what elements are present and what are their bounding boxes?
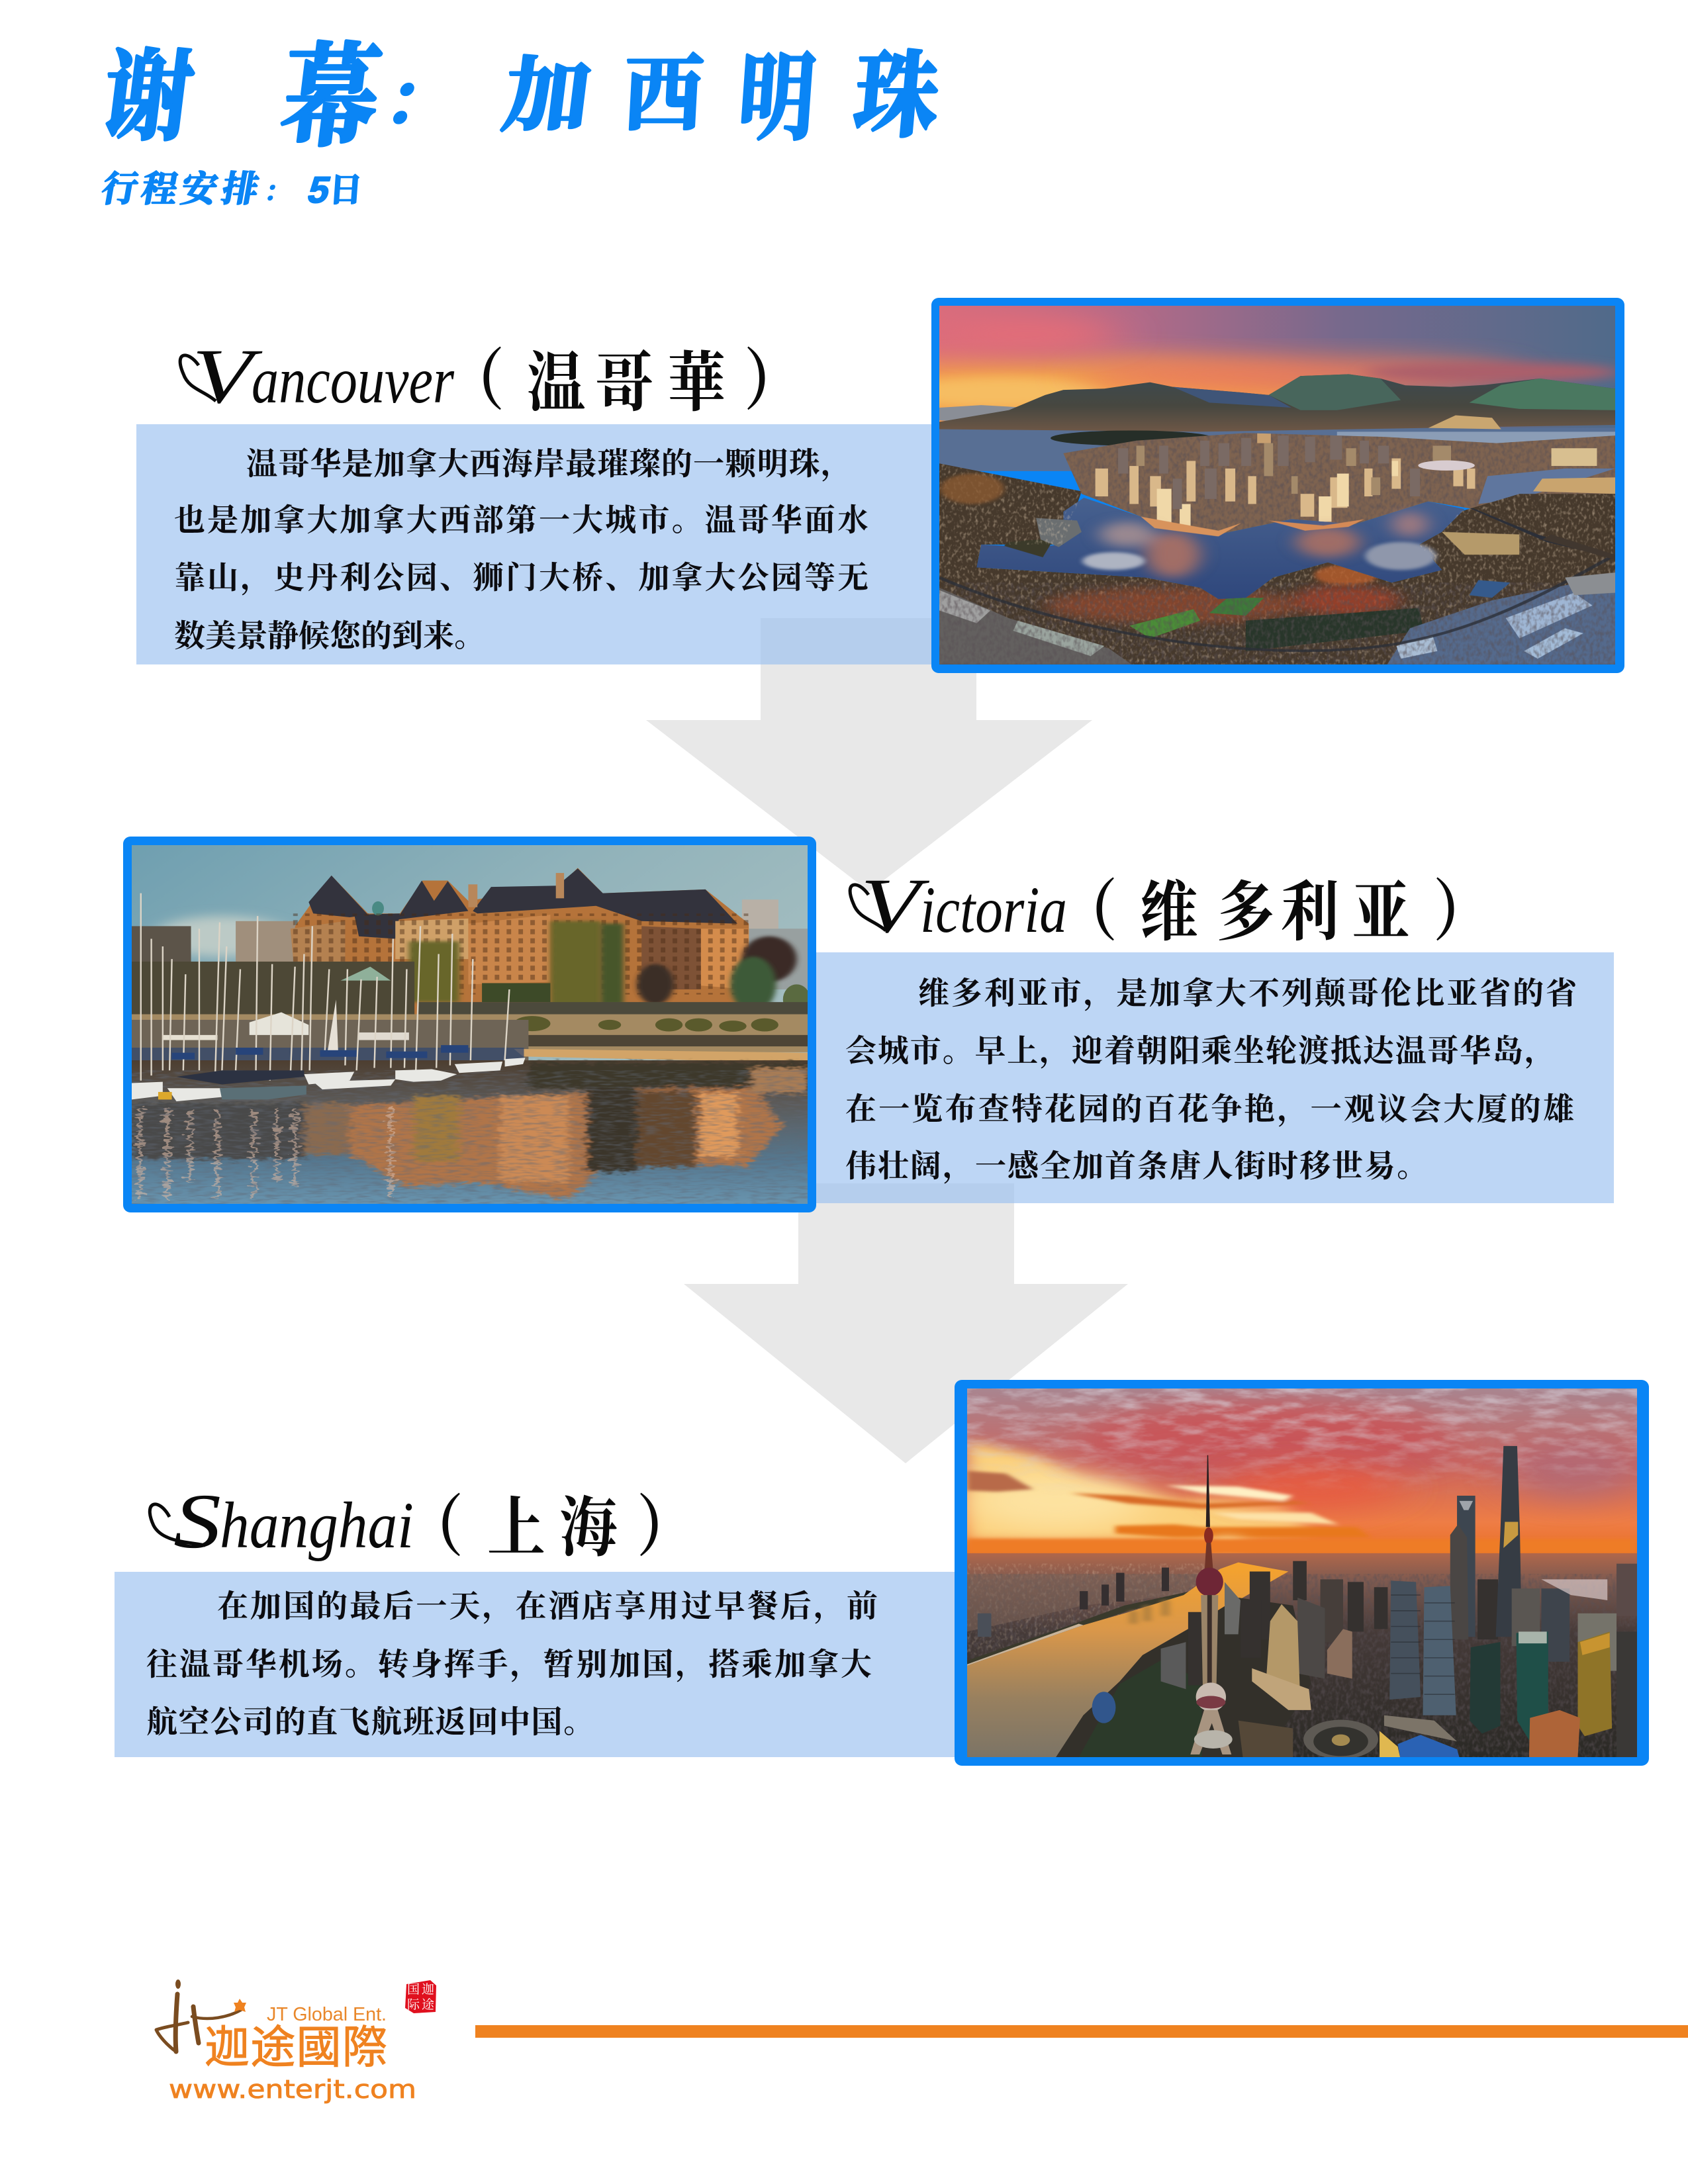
heading: Vancouver [180,328,802,424]
heading: Vancouver: ） [744,328,802,424]
heading: Victoria: （ [1059,858,1117,954]
icon: maple leaf [234,1999,246,2012]
subtitle: itinerary length: 日 [328,163,364,211]
logo text: company name: 迦途國際 [205,2023,387,2073]
icon: red seal [405,1980,436,2013]
title [96,8,945,168]
heading: Victoria: 维 [1140,859,1198,953]
text block: Vancouver description: 数美景静候您的到来。 [174,619,485,654]
text block: Shanghai description: 在加国的最后一天，在酒店享用过早餐后，前 [217,1590,878,1625]
heading: Vancouver: V [192,333,263,420]
heading: Shanghai: S [173,1478,221,1565]
icon: red seal: 际 [407,1997,420,2012]
logo: JT Global [156,1979,436,2104]
heading: Shanghai: （ [405,1474,463,1570]
heading: Shanghai: ） [637,1474,695,1570]
text block: Victoria description: 会城市。早上，迎着朝阳乘坐轮渡抵达温哥华岛， [845,1034,1556,1069]
arrow: Victoria to Shanghai [684,1183,1128,1463]
logo text: website: www.enterjt.com [169,2075,416,2104]
heading: Vancouver: 哥 [595,330,653,424]
title: 幕 [274,8,390,168]
photo: Victoria harbour [123,837,816,1212]
text block: Vancouver description: 温哥华是加拿大西海岸最璀璨的一颗明珠， [246,447,852,482]
heading: Vancouver: ancouver [252,343,455,417]
orange divider [475,2025,1688,2038]
text block: Victoria description: 在一览布查特花园的百花争艳，一观议会大厦的雄 [845,1093,1574,1128]
icon: jt brush monogram [156,1979,241,2052]
subtitle: itinerary length [98,159,364,212]
heading: Victoria: 利 [1281,859,1339,953]
text block: Vancouver description: 靠山，史丹利公园、狮门大桥、加拿大公园等无 [174,561,868,596]
heading: Victoria: ictoria [920,873,1067,946]
subtitle: itinerary length: ： [260,170,297,210]
text block: Vancouver description [174,447,868,654]
text block: Shanghai description: 往温哥华机场。转身挥手，暂别加国，搭乘加拿大 [146,1648,872,1683]
heading: Shanghai [150,1474,695,1570]
icon: red seal: 国 [407,1982,420,1997]
heading: Victoria: 多 [1217,859,1275,953]
subtitle: itinerary length: 5 [304,170,334,211]
heading: Vancouver: 温 [527,330,585,424]
heading: Victoria [850,858,1491,954]
title: 西 [621,28,706,148]
photo: Shanghai skyline [955,1380,1649,1766]
arrow: Vancouver to Victoria [646,618,1092,891]
panel: Shanghai text box [115,1572,959,1757]
text block: Victoria description: 伟壮阔，一感全加首条唐人街时移世易。 [845,1150,1428,1185]
heading: Victoria: V [861,862,930,949]
heading: Shanghai: hanghai [220,1488,414,1562]
subtitle: itinerary length: 安 [177,159,224,212]
title: 谢 [96,18,203,159]
text block: Victoria description: 维多利亚市，是加拿大不列颠哥伦比亚省的省 [918,977,1578,1012]
title: ： [373,42,473,147]
oriental pearl tower [1190,1455,1233,1754]
subtitle: itinerary length: 排 [218,159,263,212]
heading: Vancouver: （ [446,328,504,424]
title: 明 [734,23,820,159]
panel: Vancouver text box [136,424,937,664]
text block: Shanghai description: 航空公司的直飞航班返回中国。 [146,1706,594,1740]
heading: Victoria: ） [1433,858,1491,954]
logo text: JT Global Ent.: JT Global Ent. [267,2004,387,2025]
icon: red seal: 途 [422,1997,434,2012]
panel: Victoria text box [811,952,1614,1203]
text block: Victoria description [845,977,1578,1185]
photo: Vancouver skyline [931,298,1624,673]
subtitle: itinerary length: 程 [138,159,183,212]
heading: Vancouver: 華 [667,330,726,424]
title: 珠 [849,21,945,156]
title: 加 [498,30,598,148]
icon: red seal: 迦 [422,1982,434,1997]
subtitle: itinerary length: 行 [98,159,143,212]
heading: Victoria: 亚 [1352,859,1410,953]
text block: Vancouver description: 也是加拿大加拿大西部第一大城市。温哥华面水 [174,504,868,538]
text block: Shanghai description [146,1590,878,1740]
heading: Shanghai: 上 [487,1475,545,1569]
heading: Shanghai: 海 [559,1475,618,1569]
